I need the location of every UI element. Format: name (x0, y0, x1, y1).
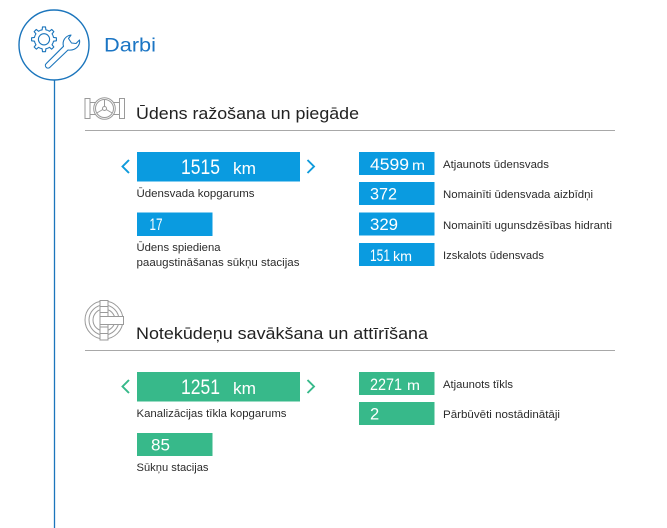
arrow: left (122, 160, 129, 173)
stat: hydrants (359, 212, 612, 236)
stat: pump stations: 17 (150, 216, 162, 234)
stat: network renewed (359, 372, 514, 395)
stat: pump stations (137, 433, 212, 456)
label: paaugstināšanas sūkņu stacijas (136, 257, 300, 269)
stat: hydrants: Nomainīti ugunsdzēsības hidranti (443, 220, 612, 232)
label: Ūdensvada kopgarums (136, 188, 255, 200)
arrow: right (308, 380, 314, 393)
stat: renewed: Atjaunots ūdensvads (443, 159, 550, 171)
stat: network renewed: m (407, 377, 420, 393)
icon: gear and wrench in circle (19, 10, 89, 80)
stat: network renewed: 2271 (370, 376, 402, 394)
title: Darbi (104, 36, 156, 56)
stat: renewed: m (412, 157, 425, 173)
stat: sewer length (137, 372, 300, 402)
stat: flushed: km (393, 248, 412, 264)
stat: renewed: 4599 (370, 156, 409, 174)
stat: rebuilt settlers (359, 402, 560, 425)
stat: total length: 1515 (181, 155, 220, 179)
heading: Notekūdeņu savākšana un attīrīšana (136, 324, 429, 343)
icon: valve (85, 98, 124, 119)
stat: flushed: Izskalots ūdensvads (443, 250, 545, 262)
arrow: left (122, 380, 129, 393)
stat: valves (359, 182, 593, 205)
stat: valves: Nomainīti ūdensvada aizbīdņi (443, 189, 593, 201)
stat: total length (137, 152, 300, 182)
section: water (85, 98, 615, 269)
stat: rebuilt settlers: Pārbūvēti nostādinātāji (443, 409, 560, 421)
label: Ūdens spiediena (136, 242, 221, 254)
stat: renewed (359, 152, 550, 175)
stat: sewer length: 1251 (181, 375, 220, 399)
heading: Ūdens ražošana un piegāde (136, 104, 359, 123)
stat: rebuilt settlers: 2 (370, 406, 379, 424)
stat: network renewed: Atjaunots tīkls (443, 379, 514, 391)
arrow: right (308, 160, 314, 173)
stat: sewer length: km (233, 379, 256, 398)
stat: pump stations (137, 212, 212, 236)
label: Kanalizācijas tīkla kopgarums (136, 408, 287, 420)
label: Sūkņu stacijas (136, 462, 209, 474)
section: wastewater (85, 300, 615, 474)
stat: flushed (359, 243, 545, 266)
stat: total length: km (233, 159, 256, 178)
label (136, 242, 300, 269)
timeline line (54, 80, 56, 528)
stat: valves: 372 (370, 186, 397, 204)
stat: flushed: 151 (370, 247, 390, 265)
stat: pump stations: 85 (151, 436, 170, 454)
stat: hydrants: 329 (370, 216, 398, 234)
icon: treatment plant (85, 300, 124, 340)
